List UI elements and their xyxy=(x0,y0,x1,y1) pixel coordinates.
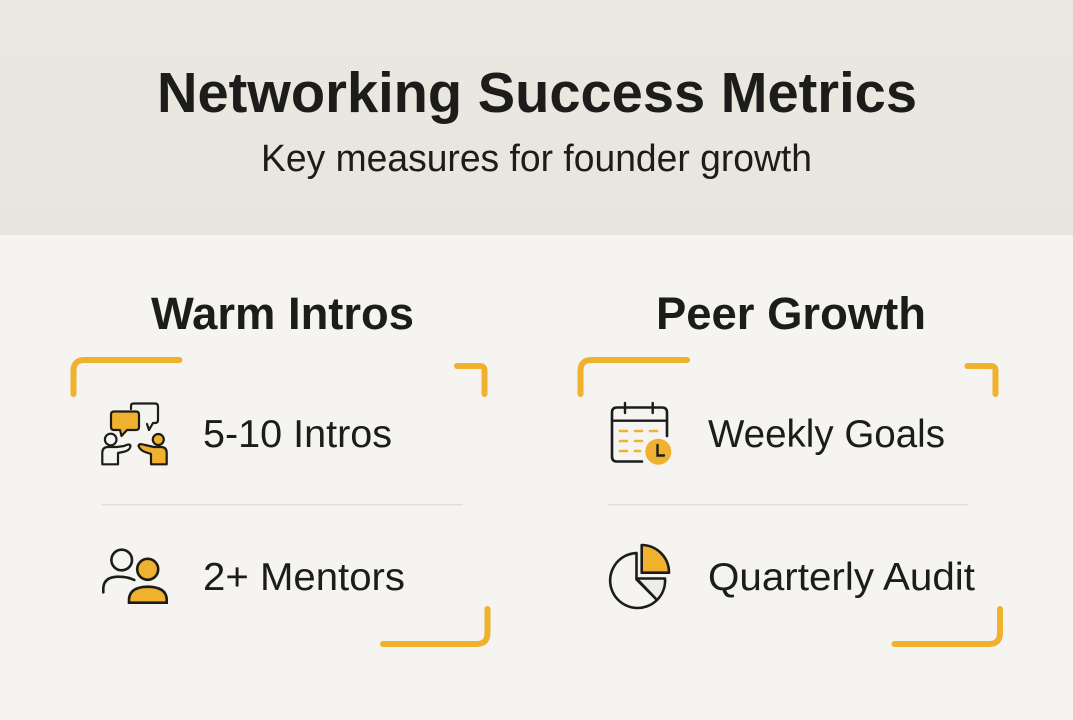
label: 2+ mentors: 2+ Mentors xyxy=(203,556,405,599)
header band xyxy=(0,0,1073,235)
icon: mentors xyxy=(103,550,167,603)
bracket: top right xyxy=(457,366,484,394)
heading: warm intros: Warm Intros xyxy=(151,288,414,339)
subtitle: Key measures for founder growth xyxy=(261,138,812,180)
bracket: bottom right xyxy=(894,609,1000,644)
panel: warm intros xyxy=(74,288,488,644)
divider xyxy=(608,504,968,506)
bracket: bottom right xyxy=(383,609,488,644)
bracket: top left xyxy=(580,360,687,394)
icon: pie chart xyxy=(610,545,669,608)
label: weekly goals: Weekly Goals xyxy=(708,413,945,456)
heading: peer growth: Peer Growth xyxy=(656,288,926,339)
panel: peer growth xyxy=(580,288,1000,644)
icon: calendar with clock xyxy=(612,403,671,465)
label: quarterly audit: Quarterly Audit xyxy=(708,556,975,599)
title: Networking Success Metrics xyxy=(157,61,917,125)
divider xyxy=(101,504,463,506)
icon: conversation xyxy=(102,404,167,464)
label: 5-10 intros: 5-10 Intros xyxy=(203,413,392,456)
bracket: top right xyxy=(968,366,996,394)
bracket: top left xyxy=(74,360,180,394)
